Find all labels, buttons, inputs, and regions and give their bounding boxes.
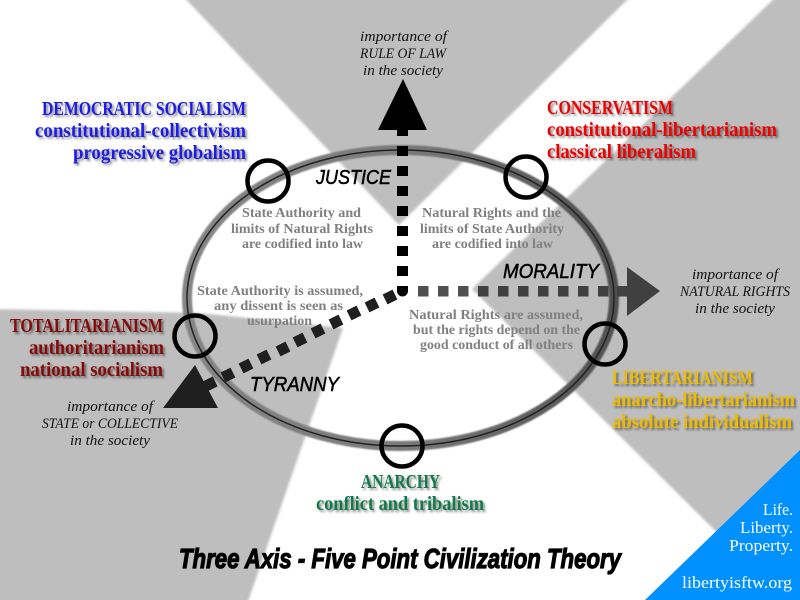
label: conservatism: CONSERVATISM [547, 97, 673, 119]
label: democratic socialism [35, 98, 246, 164]
note: justice right [420, 206, 564, 252]
note: justice left: are codified into law [242, 237, 364, 252]
axis caption: natural rights: NATURAL RIGHTS [679, 284, 790, 300]
note: tyranny: any dissent is seen as [214, 299, 344, 314]
corner badge [645, 450, 800, 600]
note: morality: Natural Rights are assumed, [409, 308, 583, 323]
label: libertarianism: LIBERTARIANISM [612, 367, 753, 389]
label: totalitarianism [10, 315, 164, 381]
note: justice right: limits of State Authority [420, 222, 564, 237]
axis caption: state or collective: in the society [70, 433, 150, 449]
axis arrow: natural rights [418, 267, 660, 316]
note: tyranny: usurpation [247, 314, 312, 329]
axis caption: state or collective: STATE or COLLECTIVE [42, 416, 178, 432]
axis caption: rule of law: importance of [360, 29, 449, 45]
note: tyranny [197, 284, 363, 329]
label: libertarianism: absolute individualism [612, 411, 792, 433]
label: conservatism [547, 97, 777, 163]
axis caption: natural rights [679, 267, 790, 317]
label: totalitarianism: authoritarianism [29, 337, 164, 359]
label: totalitarianism: TOTALITARIANISM [10, 315, 163, 337]
note: justice right: are codified into law [432, 237, 554, 252]
axis caption: rule of law [359, 29, 449, 79]
label: democratic socialism: DEMOCRATIC SOCIALISM [42, 98, 246, 120]
point name: morality: MORALITY [503, 261, 601, 283]
axis arrow: rule of law [378, 79, 427, 296]
label: totalitarianism: national socialism [20, 359, 163, 381]
corner badge: Property. [729, 536, 793, 555]
point name: tyranny: TYRANNY [250, 374, 341, 396]
note: justice left: limits of Natural Rights [231, 222, 374, 237]
note: tyranny: State Authority is assumed, [197, 284, 363, 299]
note: morality: good conduct of all others [420, 338, 574, 353]
label: anarchy: ANARCHY [361, 471, 440, 493]
civilization ellipse [187, 150, 614, 446]
axis caption: natural rights: in the society [695, 301, 775, 317]
note: morality: but the rights depend on the [413, 323, 580, 338]
note: justice right: Natural Rights and the [422, 206, 561, 221]
point name: justice: JUSTICE [315, 167, 392, 189]
corner badge: Liberty. [740, 518, 793, 537]
label: libertarianism [612, 367, 795, 433]
axis caption: natural rights: importance of [692, 267, 780, 283]
axis caption: state or collective: importance of [67, 399, 155, 415]
axis caption: rule of law: RULE OF LAW [359, 46, 447, 62]
note: justice left: State Authority and [242, 206, 361, 221]
corner badge: Life. [763, 500, 793, 519]
axis caption: rule of law: in the society [363, 63, 443, 79]
axis arrow: state or collective [163, 290, 397, 408]
note: justice left [231, 206, 374, 252]
label: democratic socialism: progressive globalism [73, 142, 246, 164]
label: anarchy [316, 471, 484, 515]
label: democratic socialism: constitutional-collectivism [35, 120, 246, 142]
title: Three Axis - Five Point Civilization Theory [179, 543, 622, 574]
label: conservatism: constitutional-libertarianism [547, 119, 777, 141]
axis caption: state or collective [42, 399, 178, 449]
label: anarchy: conflict and tribalism [316, 493, 484, 515]
note: morality [409, 308, 583, 353]
label: conservatism: classical liberalism [547, 141, 696, 163]
corner badge: libertyisftw.org [682, 573, 792, 592]
position circles [174, 156, 626, 466]
